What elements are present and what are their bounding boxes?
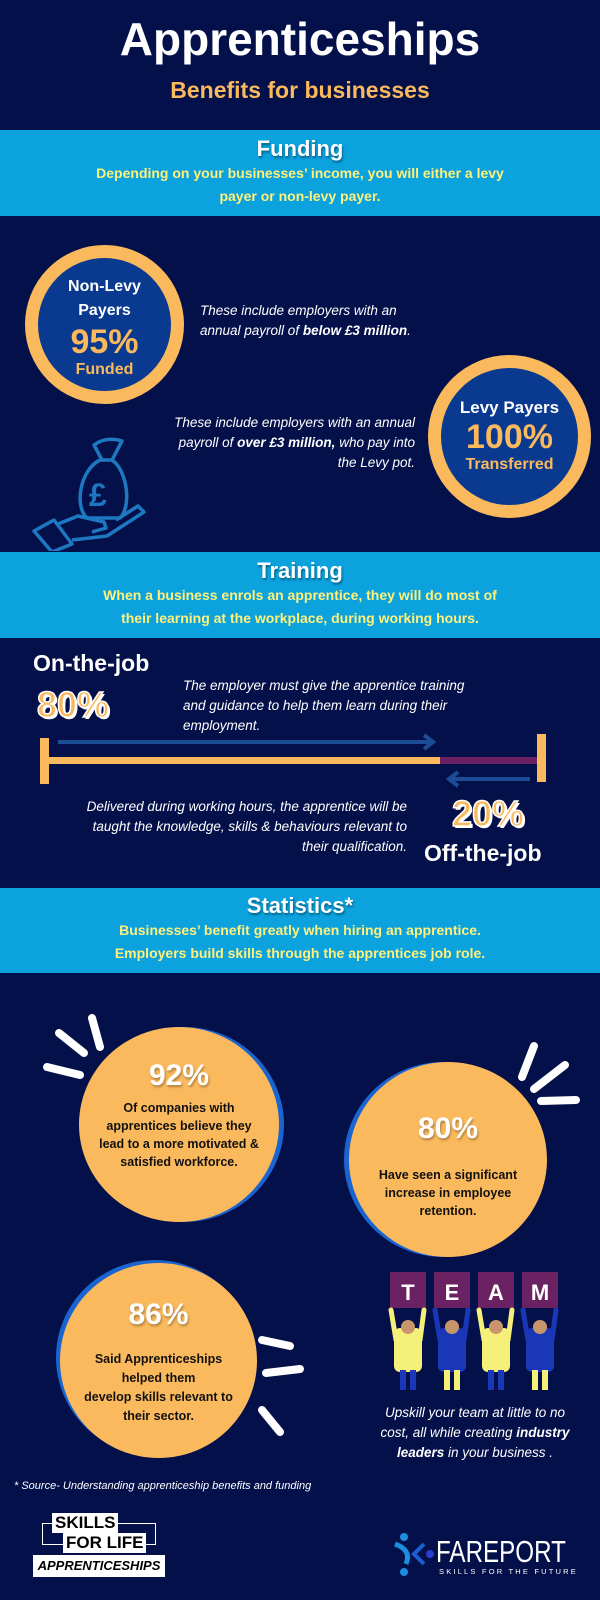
non-levy circle xyxy=(25,245,184,404)
off-the-job label: Off-the-job xyxy=(424,840,542,866)
stat circle 92% xyxy=(79,1027,279,1222)
stat circle 80% xyxy=(349,1062,547,1257)
stat circle 80%: increase in employee xyxy=(385,1186,511,1200)
stat circle 80%: Have seen a significant xyxy=(379,1168,517,1182)
levy text xyxy=(174,415,416,470)
on-the-job label: On-the-job xyxy=(33,650,149,676)
stat circle 92%: apprentices believe they xyxy=(106,1119,252,1133)
non-levy text: annual payroll of below £3 million. xyxy=(200,323,411,338)
logo: fareport xyxy=(394,1533,578,1576)
team illustration: M xyxy=(531,1280,549,1305)
title: Apprenticeships xyxy=(120,13,480,65)
stat circle 86%: their sector. xyxy=(123,1409,194,1423)
stat circle 80%: 80% xyxy=(418,1112,478,1145)
logo: skills for life: FOR LIFE xyxy=(66,1533,143,1552)
team illustration: A xyxy=(488,1280,504,1305)
icon: money bag in hand xyxy=(32,438,146,551)
source note: * Source- Understanding apprenticeship benefits and funding xyxy=(14,1480,311,1492)
stat circle 92%: Of companies with xyxy=(123,1101,235,1115)
funding band: Depending on your businesses’ income, you will either a levy xyxy=(96,165,504,181)
stat circle 86%: develop skills relevant to xyxy=(84,1390,233,1404)
levy circle: Transferred xyxy=(465,456,554,473)
statistics band: Statistics* xyxy=(247,893,353,918)
off-the-job text: taught the knowledge, skills & behaviours relevant to xyxy=(93,819,407,834)
levy text: payroll of over £3 million, who pay into xyxy=(179,435,415,450)
subtitle: Benefits for businesses xyxy=(170,77,430,103)
stat circle 92%: 92% xyxy=(149,1059,209,1092)
non-levy circle: Funded xyxy=(76,361,133,378)
training band: When a business enrols an apprentice, they will do most of xyxy=(103,587,497,603)
funding band: payer or non-levy payer. xyxy=(219,188,381,204)
off-the-job text: Delivered during working hours, the apprentice will be xyxy=(87,799,407,814)
icon: money bag in hand: £ xyxy=(89,477,107,513)
statistics band xyxy=(0,888,600,973)
levy text: the Levy pot. xyxy=(338,455,415,470)
off-the-job text xyxy=(87,799,407,854)
on-the-job text xyxy=(183,678,464,733)
logo: fareport: FAREPORT xyxy=(436,1534,566,1569)
non-levy circle: Payers xyxy=(78,302,131,319)
on-the-job text: The employer must give the apprentice training xyxy=(183,678,464,693)
stat circle 86%: Said Apprenticeships xyxy=(95,1352,222,1366)
team illustration xyxy=(388,1272,558,1390)
upskill text: Upskill your team at little to no xyxy=(385,1405,565,1420)
80%: 80% xyxy=(37,684,109,725)
training band xyxy=(0,552,600,638)
non-levy circle: 95% xyxy=(70,323,139,361)
statistics band: Businesses’ benefit greatly when hiring an apprentice. xyxy=(119,922,481,938)
levy circle: 100% xyxy=(466,418,553,456)
upskill text: cost, all while creating industry xyxy=(380,1425,570,1440)
training band: their learning at the workplace, during working hours. xyxy=(121,610,479,626)
team illustration: E xyxy=(445,1280,459,1305)
funding band xyxy=(0,130,600,216)
statistics band: Employers build skills through the apprentices job role. xyxy=(115,945,485,961)
stat circle 86%: 86% xyxy=(128,1298,189,1331)
levy text: These include employers with an annual xyxy=(174,415,415,430)
logo: skills for life: APPRENTICESHIPS xyxy=(38,1558,160,1573)
timeline bar xyxy=(40,734,546,788)
training band: Training xyxy=(257,558,343,583)
20%: 20% xyxy=(452,793,524,834)
stat circle 86%: helped them xyxy=(122,1371,195,1385)
levy circle: Levy Payers xyxy=(460,398,559,417)
funding band: Funding xyxy=(257,136,343,161)
team illustration: T xyxy=(401,1280,415,1305)
levy circle xyxy=(428,355,591,518)
upskill text: leaders in your business . xyxy=(397,1445,553,1460)
on-the-job text: employment. xyxy=(183,718,260,733)
logo: skills for life xyxy=(33,1513,165,1577)
stat circle 86% xyxy=(60,1263,257,1458)
logo: skills for life: SKILLS xyxy=(55,1513,115,1532)
logo: fareport: SKILLS FOR THE FUTURE xyxy=(439,1567,578,1576)
non-levy circle: Non-Levy xyxy=(68,278,141,295)
stat circle 92%: lead to a more motivated & xyxy=(99,1137,259,1151)
stat circle 92%: satisfied workforce. xyxy=(120,1155,238,1169)
non-levy text xyxy=(200,303,411,338)
upskill text xyxy=(380,1405,570,1460)
stat circle 80%: retention. xyxy=(420,1204,476,1218)
on-the-job text: and guidance to help them learn during their xyxy=(183,698,447,713)
off-the-job text: their qualification. xyxy=(302,839,407,854)
non-levy text: These include employers with an xyxy=(200,303,397,318)
